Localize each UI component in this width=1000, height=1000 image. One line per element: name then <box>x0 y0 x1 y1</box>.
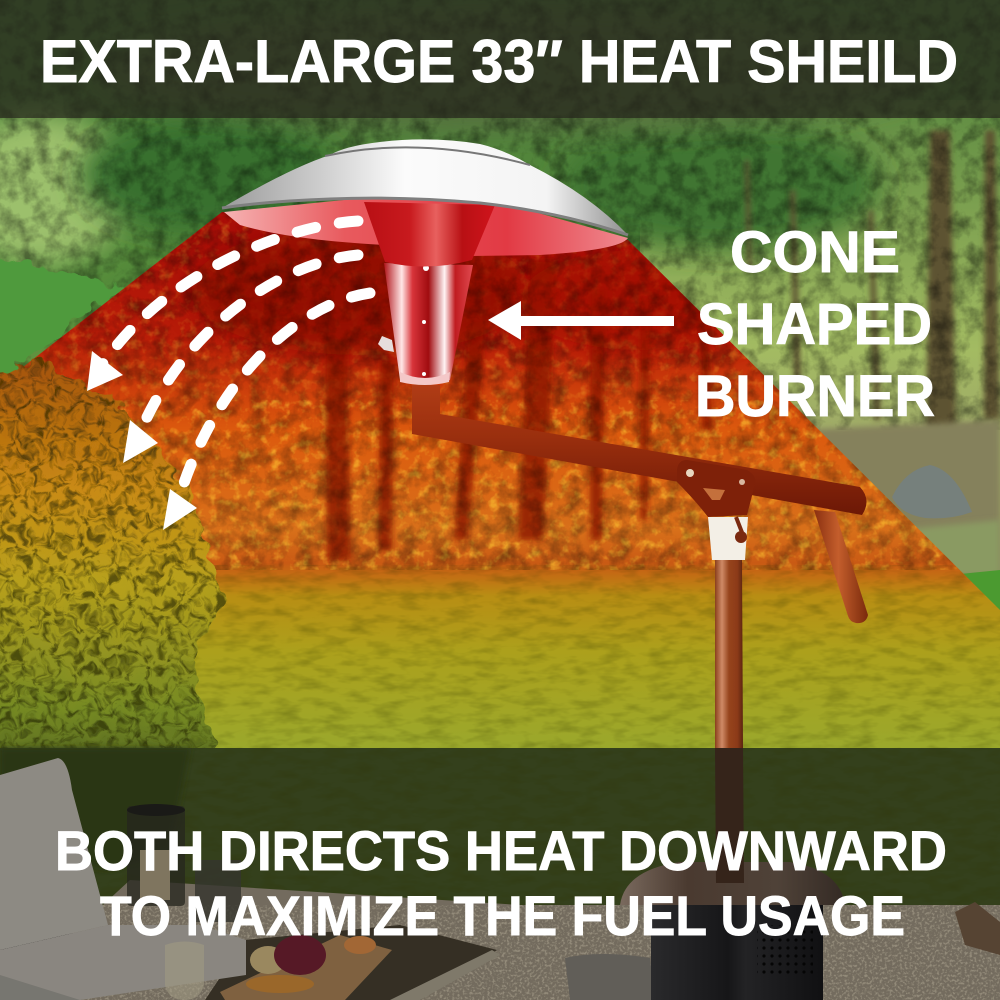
elbow and arm <box>412 385 867 515</box>
glass table edge <box>390 950 500 1000</box>
stepping stone <box>565 954 655 1000</box>
heat shield dome <box>222 139 628 235</box>
sofa back cushion <box>0 758 108 950</box>
heat zone: red-to-yellow tinted cone of warmth <box>0 200 1000 750</box>
callout: cone shaped burner: SHAPED <box>697 292 932 357</box>
callout: cone shaped burner: BURNER <box>695 364 935 429</box>
patio heater <box>222 139 868 1000</box>
dark band over the bottom <box>0 748 1000 1000</box>
fuel cylinder <box>651 905 823 1000</box>
handle <box>814 510 868 623</box>
rock <box>892 465 972 518</box>
callout: cone shaped burner <box>695 220 935 429</box>
bottom photo area: lawn, gravel and patio <box>0 748 1000 1000</box>
wine glass <box>165 942 204 1000</box>
dark band over the top <box>0 0 1000 118</box>
arrow pointing to burner <box>488 301 674 340</box>
support pole <box>715 560 743 748</box>
flow arrow 1 <box>87 221 358 391</box>
burner <box>378 263 473 385</box>
flow arrow 3 <box>163 293 370 530</box>
reflective cone <box>364 202 495 267</box>
wooden stump <box>955 902 1000 955</box>
yellow leafy bush on the left <box>0 356 226 748</box>
lantern <box>127 804 241 922</box>
reflector underside <box>224 198 628 256</box>
title: EXTRA-LARGE 33″ HEAT SHEILD <box>40 28 958 95</box>
photo background: forest and lawn <box>0 0 1000 612</box>
top cap ring <box>325 147 530 165</box>
bracket <box>677 460 755 543</box>
sofa seat <box>0 925 246 1000</box>
base dome <box>620 862 845 905</box>
callout: cone shaped burner: CONE <box>730 220 900 285</box>
patio table <box>205 925 497 1000</box>
white collar <box>708 517 748 560</box>
bottom message: TO MAXIMIZE THE FUEL USAGE <box>100 884 905 947</box>
green shrub <box>0 255 125 410</box>
bottom message: BOTH DIRECTS HEAT DOWNWARD <box>55 819 947 882</box>
shield rim <box>222 198 628 235</box>
dashed heat flow arrows <box>87 221 370 530</box>
bottom message <box>55 819 947 947</box>
food board <box>220 935 392 1000</box>
flow arrow 2 <box>123 255 358 463</box>
